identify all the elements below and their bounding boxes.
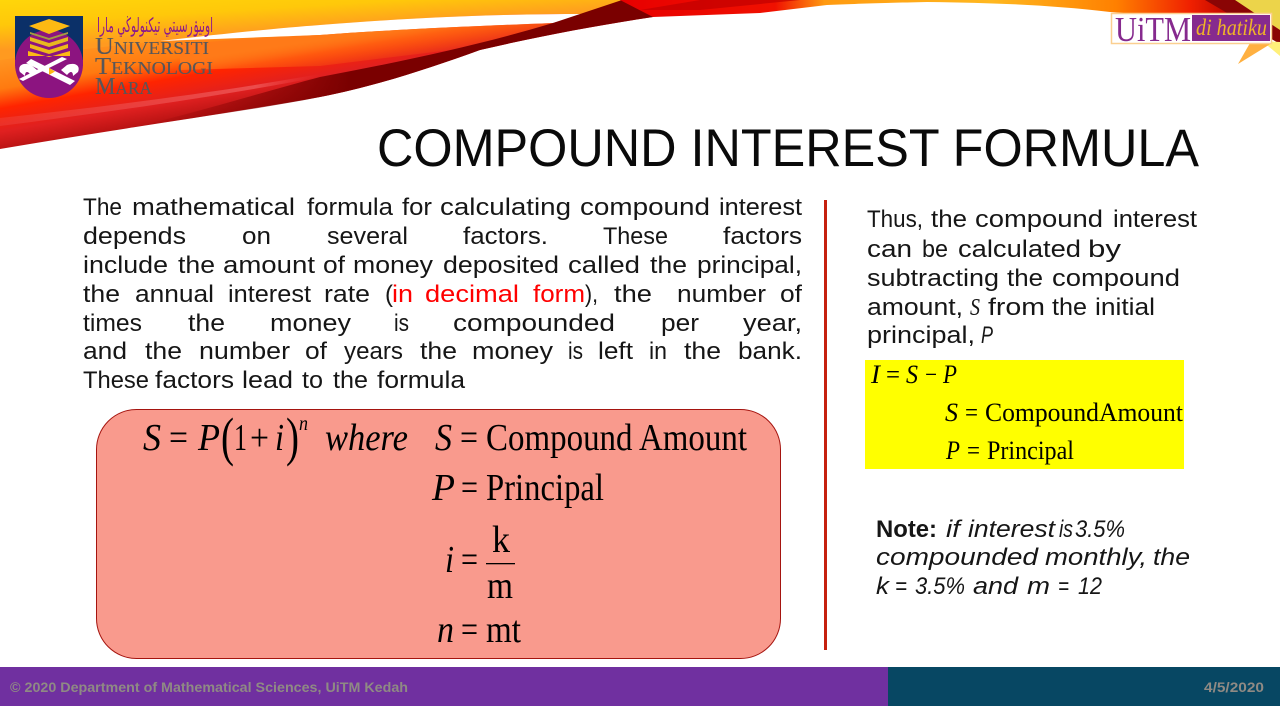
- text block: explanation paragraph: form: [533, 281, 585, 308]
- text block: explanation paragraph: factors: [155, 367, 234, 394]
- callout: note: m: [1027, 573, 1050, 600]
- callout: note: 12: [1078, 573, 1102, 600]
- text block: explanation paragraph: rate: [324, 281, 370, 308]
- callout: note: if: [946, 516, 963, 543]
- callout: note: Note:: [876, 516, 937, 543]
- panel: compound amount formula: 1: [234, 417, 247, 459]
- title: COMPOUND INTEREST FORMULA: [377, 119, 1200, 178]
- footer bar: [0, 667, 1280, 706]
- panel: compound amount formula: where: [325, 417, 408, 459]
- callout: note: interest: [968, 516, 1056, 543]
- text block: explanation paragraph: called: [568, 252, 640, 279]
- divider: red vertical rule: [824, 200, 827, 650]
- panel: compound amount formula: S: [143, 417, 161, 459]
- text block: explanation paragraph: formula: [377, 367, 466, 394]
- text block: compound interest explanation: S: [970, 295, 980, 321]
- panel: compound amount formula: i: [275, 417, 284, 459]
- text block: explanation paragraph: include: [83, 252, 168, 279]
- callout: note: k: [876, 573, 891, 600]
- text block: compound interest explanation: Thus,: [867, 206, 923, 233]
- panel: interest formula: P: [942, 360, 957, 389]
- panel: interest formula: P: [945, 436, 960, 465]
- text block: explanation paragraph: of: [305, 338, 327, 365]
- text block: compound interest explanation: P: [981, 322, 993, 349]
- logo: university name: MARA: [95, 74, 152, 100]
- text block: explanation paragraph: is: [568, 338, 583, 365]
- text block: explanation paragraph: (: [385, 281, 393, 308]
- callout: note: is: [1059, 516, 1073, 543]
- text block: explanation paragraph: the: [614, 281, 652, 308]
- text block: explanation paragraph: money: [472, 338, 553, 365]
- text block: explanation paragraph: These: [603, 223, 668, 250]
- callout: note: the: [1153, 544, 1190, 571]
- panel: compound amount formula: P: [197, 417, 220, 459]
- panel: compound amount formula: Compound Amount: [486, 417, 747, 459]
- text block: explanation paragraph: interest: [719, 194, 802, 221]
- callout: note: 3.5%: [915, 573, 965, 600]
- text block: explanation paragraph: left: [598, 338, 633, 365]
- callout: note: =: [1058, 573, 1069, 600]
- panel: compound amount formula: =: [460, 417, 478, 459]
- panel: interest formula: S: [945, 398, 958, 427]
- callout: note: monthly,: [1045, 544, 1147, 571]
- panel: compound amount formula: k: [492, 519, 510, 561]
- text block: compound interest explanation: the: [1007, 265, 1043, 292]
- panel: compound amount formula: =: [461, 539, 478, 581]
- panel: compound amount formula: =: [169, 417, 188, 459]
- panel: compound amount formula: ): [286, 407, 299, 467]
- text block: explanation paragraph: number: [677, 281, 766, 308]
- text block: explanation paragraph: formula: [307, 194, 394, 221]
- text block: explanation paragraph: money: [270, 310, 351, 337]
- text block: explanation paragraph: for: [402, 194, 432, 221]
- footer bar: © 2020 Department of Mathematical Sciences, UiTM Kedah: [10, 679, 408, 695]
- text block: explanation paragraph: compounded: [453, 310, 615, 337]
- text block: compound interest explanation: the: [931, 206, 967, 233]
- text block: explanation paragraph: principal,: [697, 252, 802, 279]
- text block: compound interest explanation: principal,: [867, 322, 975, 349]
- text block: explanation paragraph: the: [145, 338, 182, 365]
- text block: explanation paragraph: amount: [223, 252, 315, 279]
- panel: interest formula: −: [925, 360, 937, 389]
- text block: explanation paragraph: of: [323, 252, 345, 279]
- panel: interest formula: =: [965, 398, 978, 427]
- logo: university name: اونيۏرسيتي تيكنولوڬي مارا: [97, 13, 213, 38]
- text block: explanation paragraph: on: [242, 223, 271, 250]
- text block: explanation paragraph: deposited: [443, 252, 559, 279]
- text block: explanation paragraph: several: [327, 223, 408, 250]
- text block: explanation paragraph: is: [394, 310, 409, 337]
- logo: UiTM di hatiku badge: UiTM: [1115, 10, 1191, 49]
- text block: compound interest explanation: compound: [1052, 265, 1180, 292]
- callout: note: [876, 516, 1190, 600]
- text block: explanation paragraph: lead: [242, 367, 293, 394]
- text block: explanation paragraph: factors: [723, 223, 802, 250]
- text block: explanation paragraph: [83, 194, 802, 394]
- panel: compound amount formula: mt: [486, 609, 521, 651]
- text block: compound interest explanation: be: [922, 236, 948, 263]
- logo: university name: UNIVERSITI: [95, 34, 209, 60]
- panel: interest formula: [865, 360, 1184, 469]
- text block: explanation paragraph: per: [661, 310, 699, 337]
- text block: compound interest explanation: by: [1088, 236, 1121, 263]
- text block: explanation paragraph: annual: [135, 281, 214, 308]
- text block: explanation paragraph: the: [684, 338, 721, 365]
- panel: compound amount formula: [96, 407, 780, 658]
- panel: interest formula: =: [967, 436, 980, 465]
- text block: explanation paragraph: ),: [585, 281, 598, 308]
- panel: compound amount formula: =: [461, 609, 478, 651]
- text block: explanation paragraph: interest: [228, 281, 311, 308]
- panel: compound amount formula: S: [435, 417, 452, 459]
- panel: interest formula: Principal: [987, 436, 1074, 465]
- footer bar: 4/5/2020: [1204, 679, 1264, 695]
- text block: explanation paragraph: decimal: [425, 281, 519, 308]
- panel: interest formula: I: [870, 360, 881, 389]
- panel: compound amount formula: m: [487, 565, 513, 607]
- text block: explanation paragraph: the: [178, 252, 215, 279]
- text block: explanation paragraph: The: [83, 194, 122, 221]
- text block: explanation paragraph: These: [83, 367, 149, 394]
- text block: explanation paragraph: money: [353, 252, 433, 279]
- text block: explanation paragraph: the: [188, 310, 225, 337]
- panel: compound amount formula: +: [250, 417, 269, 459]
- logo: UiTM crest: [15, 16, 83, 98]
- text block: explanation paragraph: the: [333, 367, 368, 394]
- text block: explanation paragraph: in: [392, 281, 413, 308]
- banner: flame swoosh: [0, 0, 1280, 149]
- text block: explanation paragraph: to: [302, 367, 323, 394]
- text block: explanation paragraph: depends: [83, 223, 186, 250]
- text block: compound interest explanation: compound: [975, 206, 1103, 233]
- panel: compound amount formula: P: [431, 467, 455, 509]
- text block: explanation paragraph: factors.: [463, 223, 548, 250]
- text block: explanation paragraph: of: [780, 281, 802, 308]
- text block: explanation paragraph: the: [83, 281, 120, 308]
- text block: compound interest explanation: subtracting: [867, 265, 999, 292]
- text block: explanation paragraph: the: [420, 338, 457, 365]
- text block: explanation paragraph: calculating: [440, 194, 571, 221]
- callout: note: and: [973, 573, 1019, 600]
- panel: interest formula: CompoundAmount: [985, 398, 1184, 427]
- text block: explanation paragraph: year,: [743, 310, 802, 337]
- text block: compound interest explanation: from: [988, 294, 1045, 321]
- text block: compound interest explanation: amount,: [867, 294, 963, 321]
- panel: compound amount formula: =: [461, 467, 478, 509]
- text block: compound interest explanation: initial: [1095, 294, 1155, 321]
- text block: explanation paragraph: compound: [580, 194, 710, 221]
- text block: compound interest explanation: calculated: [958, 236, 1081, 263]
- panel: interest formula: =: [886, 360, 900, 389]
- text block: compound interest explanation: the: [1052, 294, 1087, 321]
- text block: explanation paragraph: and: [83, 338, 127, 365]
- callout: note: 3.5%: [1075, 516, 1125, 543]
- callout: note: compounded: [876, 544, 1039, 571]
- text block: explanation paragraph: number: [199, 338, 290, 365]
- panel: interest formula: S: [906, 360, 918, 389]
- text block: explanation paragraph: years: [344, 338, 403, 365]
- logo: UiTM di hatiku badge: di hatiku: [1196, 15, 1267, 40]
- text block: compound interest explanation: [867, 206, 1197, 349]
- panel: compound amount formula: n: [299, 413, 308, 435]
- text block: explanation paragraph: the: [650, 252, 687, 279]
- logo: university name: TEKNOLOGI: [95, 54, 213, 80]
- panel: compound amount formula: Principal: [486, 467, 604, 509]
- text block: explanation paragraph: bank.: [738, 338, 802, 365]
- logo: university name: [95, 13, 213, 100]
- callout: note: =: [895, 573, 907, 600]
- text block: compound interest explanation: interest: [1113, 206, 1197, 233]
- text block: compound interest explanation: can: [867, 236, 912, 263]
- text block: explanation paragraph: times: [83, 310, 142, 337]
- panel: compound amount formula: i: [445, 539, 454, 581]
- panel: compound amount formula: n: [437, 609, 454, 651]
- logo: UiTM di hatiku badge: [1112, 10, 1272, 64]
- panel: compound amount formula: (: [221, 407, 234, 467]
- text block: explanation paragraph: in: [649, 338, 667, 365]
- text block: explanation paragraph: mathematical: [132, 194, 295, 221]
